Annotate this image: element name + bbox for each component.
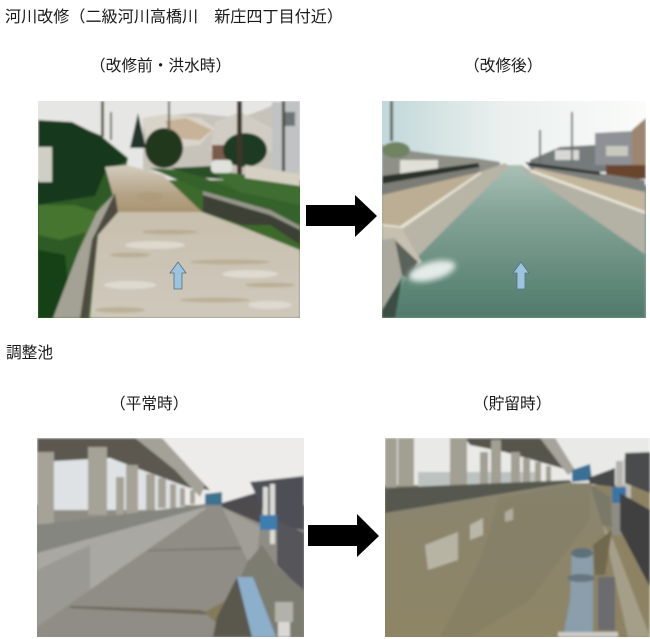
heading: retention pond: 調整池 [6,345,53,362]
label: after improvement: （改修後） [464,58,542,75]
photo: river in flood before improvement [38,101,300,318]
arrow: before to after [306,195,377,237]
photo: retention pond in normal condition [37,438,304,637]
water outflow [406,256,458,286]
photo: river after improvement [382,101,646,318]
label: before improvement during flood: （改修前・洪水時） [90,58,231,75]
icon: flow direction arrow [170,262,186,289]
icon: flow direction arrow [513,262,529,289]
arrow: normal to storage [308,514,379,557]
heading: river improvement: 河川改修（二級河川高橋川 新庄四丁目付近） [5,8,343,26]
label: during storage: （貯留時） [473,396,551,413]
label: normal condition: （平常時） [110,396,188,413]
photo: retention pond during storage [385,438,650,637]
